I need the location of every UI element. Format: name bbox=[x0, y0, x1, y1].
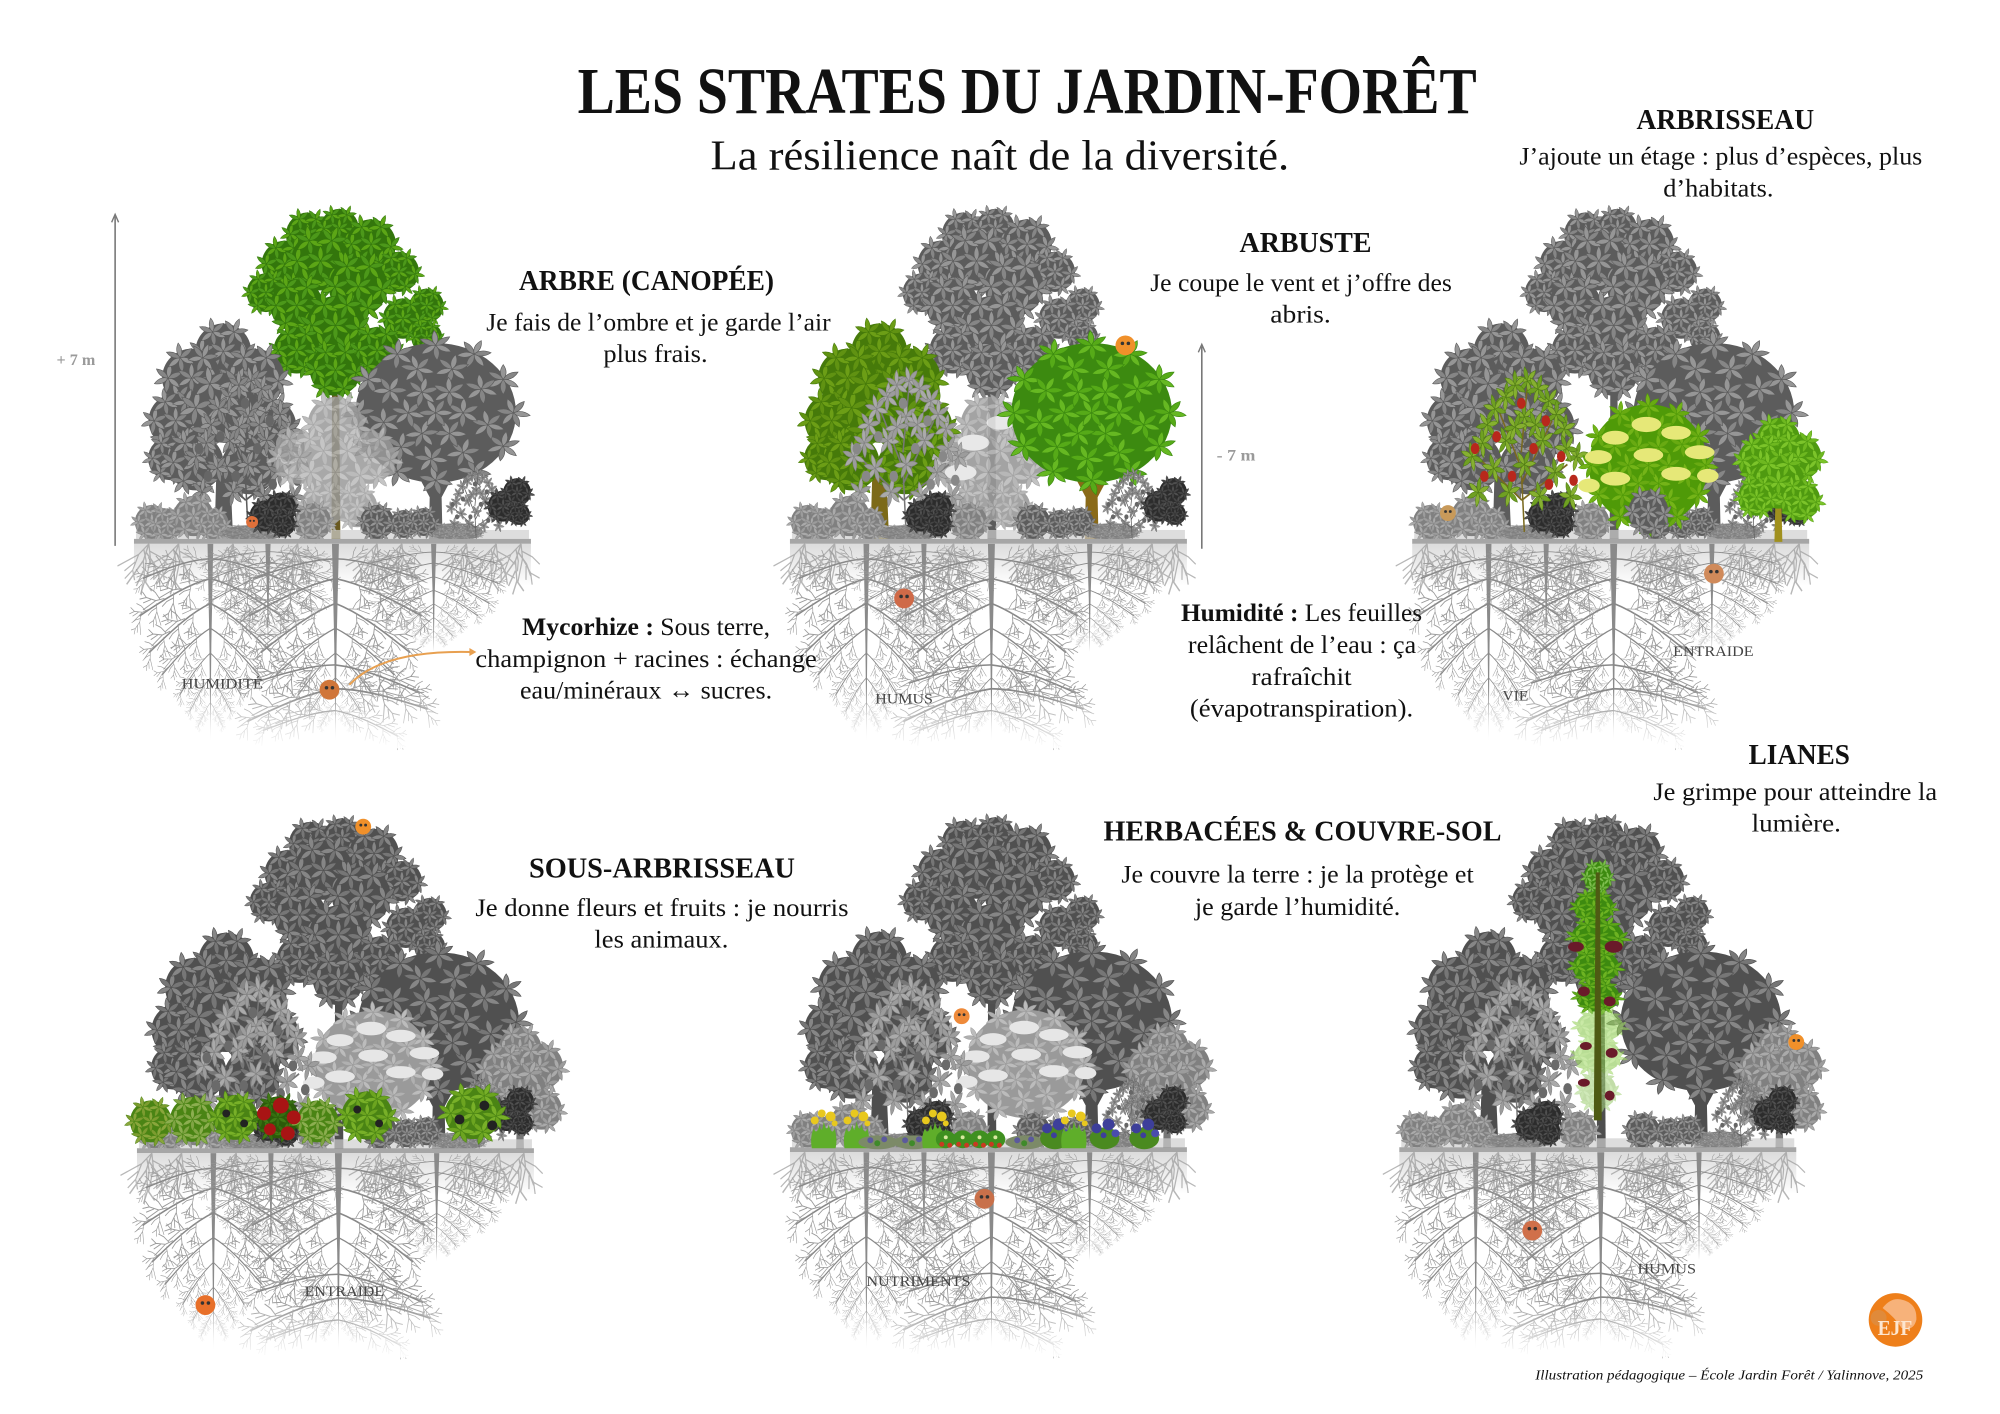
text block: arbre: plus frais. bbox=[603, 339, 708, 368]
soil word labels: NUTRIMENTS bbox=[866, 1274, 971, 1290]
pale elder shrub bbox=[952, 998, 1098, 1129]
logo: EJF bbox=[1869, 1293, 1922, 1347]
title: LES STRATES DU JARDIN-FORÊT bbox=[578, 56, 1477, 128]
text block: arbrisseau: d’habitats. bbox=[1663, 174, 1773, 203]
text block: arbrisseau bbox=[1519, 104, 1922, 203]
soil word labels: EAU bbox=[384, 618, 416, 634]
panel: herbacées et couvre-sol illustration bbox=[770, 810, 1219, 1361]
grey bushes bbox=[189, 974, 572, 1151]
ghost shrub in the middle bbox=[261, 387, 405, 537]
tree: green shrub on the right bbox=[992, 327, 1189, 542]
grey bushes bbox=[842, 973, 1219, 1150]
tree: green shrub on the left bbox=[792, 313, 964, 542]
text block: sous-arbrisseau: SOUS-ARBRISSEAU bbox=[529, 852, 795, 884]
low shrubs and ground bbox=[127, 467, 536, 548]
panel: arbrisseau illustration bbox=[1392, 202, 1830, 753]
text block: mycorhize: Mycorhize : Sous terre, bbox=[522, 612, 770, 641]
logo: EJF: EJF bbox=[1878, 1316, 1912, 1340]
coloured herbs and ground cover bbox=[811, 1110, 1159, 1149]
text block: arbrisseau: ARBRISSEAU bbox=[1636, 104, 1814, 136]
text block: humidité: relâchent de l’eau : ça bbox=[1188, 630, 1417, 659]
root system bbox=[114, 536, 551, 753]
low shrubs and ground bbox=[1405, 467, 1814, 548]
text block: herbacées: je garde l’humidité. bbox=[1194, 892, 1400, 921]
text block: sous-arbrisseau: les animaux. bbox=[594, 925, 728, 954]
pale elder shrub bbox=[299, 999, 445, 1130]
text block: lianes: lumière. bbox=[1752, 809, 1841, 838]
text block: mycorhize: eau/minéraux ↔ sucres. bbox=[520, 676, 772, 705]
mascots: orange fungi and critters bbox=[196, 335, 1804, 1315]
grey trees bbox=[1414, 202, 1811, 542]
grey trees bbox=[1401, 810, 1798, 1150]
panel: arbuste illustration bbox=[770, 202, 1207, 753]
panel: sous-arbrisseau illustration bbox=[117, 811, 572, 1362]
text block: humidité: rafraîchit bbox=[1251, 662, 1353, 691]
grey trees bbox=[139, 811, 536, 1151]
shrub: red berries bbox=[1458, 365, 1592, 532]
shrub: elder with yellow flowers bbox=[1574, 391, 1720, 539]
text block: lianes: LIANES bbox=[1749, 739, 1850, 771]
shrub: light green bush bbox=[1728, 410, 1830, 542]
small grey bush in front bbox=[1619, 483, 1676, 542]
soil word labels: ENTRAIDE bbox=[1673, 644, 1754, 660]
text block: herbacées: HERBACÉES & COUVRE-SOL bbox=[1104, 815, 1502, 848]
root system bbox=[1392, 536, 1829, 753]
soil word labels: HUMIDITÉ bbox=[182, 676, 263, 693]
height label: + 7 m: + 7 m bbox=[57, 352, 95, 369]
text block: mycorhize: champignon + racines : échange bbox=[475, 644, 817, 673]
ghost shrub with pale flowers bbox=[914, 387, 1058, 537]
text block: arbre bbox=[486, 264, 831, 368]
sparse grey bush bbox=[840, 365, 974, 532]
text block: sous-arbrisseau: Je donne fleurs et fruits : je nourris bbox=[475, 893, 849, 922]
vine climbing the trunk bbox=[1559, 856, 1634, 1120]
low shrubs and ground bbox=[130, 1076, 539, 1157]
tree: coloured canopy tree bbox=[238, 202, 450, 542]
text block: arbuste bbox=[1150, 227, 1452, 329]
text block: arbuste: ARBUSTE bbox=[1240, 227, 1372, 259]
text block: herbacées bbox=[1104, 815, 1502, 921]
text block: mycorhize bbox=[475, 612, 817, 705]
panel: arbre (canopée) illustration bbox=[114, 202, 551, 753]
text block: humidité bbox=[1181, 598, 1422, 723]
height arrow: - 7 m bbox=[1198, 344, 1205, 549]
height label: - 7 m: - 7 m bbox=[1217, 447, 1255, 464]
text block: herbacées: Je couvre la terre : je la protège et bbox=[1121, 859, 1475, 888]
height arrow: + 7 m bbox=[112, 214, 119, 546]
text block: humidité: Humidité : Les feuilles bbox=[1181, 598, 1422, 627]
low shrubs and ground bbox=[1392, 1075, 1802, 1156]
text block: arbrisseau: J’ajoute un étage : plus d’espèces, plus bbox=[1519, 142, 1922, 171]
panel: lianes illustration bbox=[1379, 810, 1831, 1361]
root system bbox=[117, 1145, 554, 1362]
text block: arbuste: abris. bbox=[1270, 300, 1331, 329]
low shrubs and ground bbox=[783, 1075, 1192, 1156]
text block: arbre: Je fais de l’ombre et je garde l’air bbox=[486, 307, 831, 336]
arrow: mycorrhiza callout bbox=[349, 648, 476, 685]
text block: lianes bbox=[1653, 739, 1938, 838]
root system bbox=[1379, 1144, 1816, 1361]
subtitle: La résilience naît de la diversité. bbox=[711, 133, 1289, 180]
coloured sub-shrubs row bbox=[120, 1079, 513, 1151]
grey bushes bbox=[1452, 973, 1831, 1150]
soil word labels bbox=[182, 618, 1754, 1300]
root system bbox=[770, 1144, 1207, 1361]
grey canopy tree bbox=[894, 202, 1106, 542]
text block: humidité: (évapotranspiration). bbox=[1190, 694, 1413, 723]
text block: lianes: Je grimpe pour atteindre la bbox=[1653, 777, 1938, 806]
low shrubs and ground bbox=[783, 467, 1192, 548]
grey background trees bbox=[136, 313, 533, 542]
soil word labels: ENTRAIDE bbox=[305, 1284, 384, 1300]
grey trees bbox=[792, 810, 1189, 1150]
footer credit: Illustration pédagogique – École Jardin Forêt / Yalinnove, 2025 bbox=[1534, 1366, 1923, 1383]
text block: sous-arbrisseau bbox=[475, 852, 849, 954]
soil word labels: VIE bbox=[1503, 689, 1528, 705]
text block: arbre: ARBRE (CANOPÉE) bbox=[519, 264, 774, 297]
root system bbox=[770, 536, 1207, 753]
soil word labels: HUMUS bbox=[1637, 1261, 1696, 1277]
soil word labels: HUMUS bbox=[875, 692, 933, 708]
text block: arbuste: Je coupe le vent et j’offre des bbox=[1150, 268, 1452, 297]
